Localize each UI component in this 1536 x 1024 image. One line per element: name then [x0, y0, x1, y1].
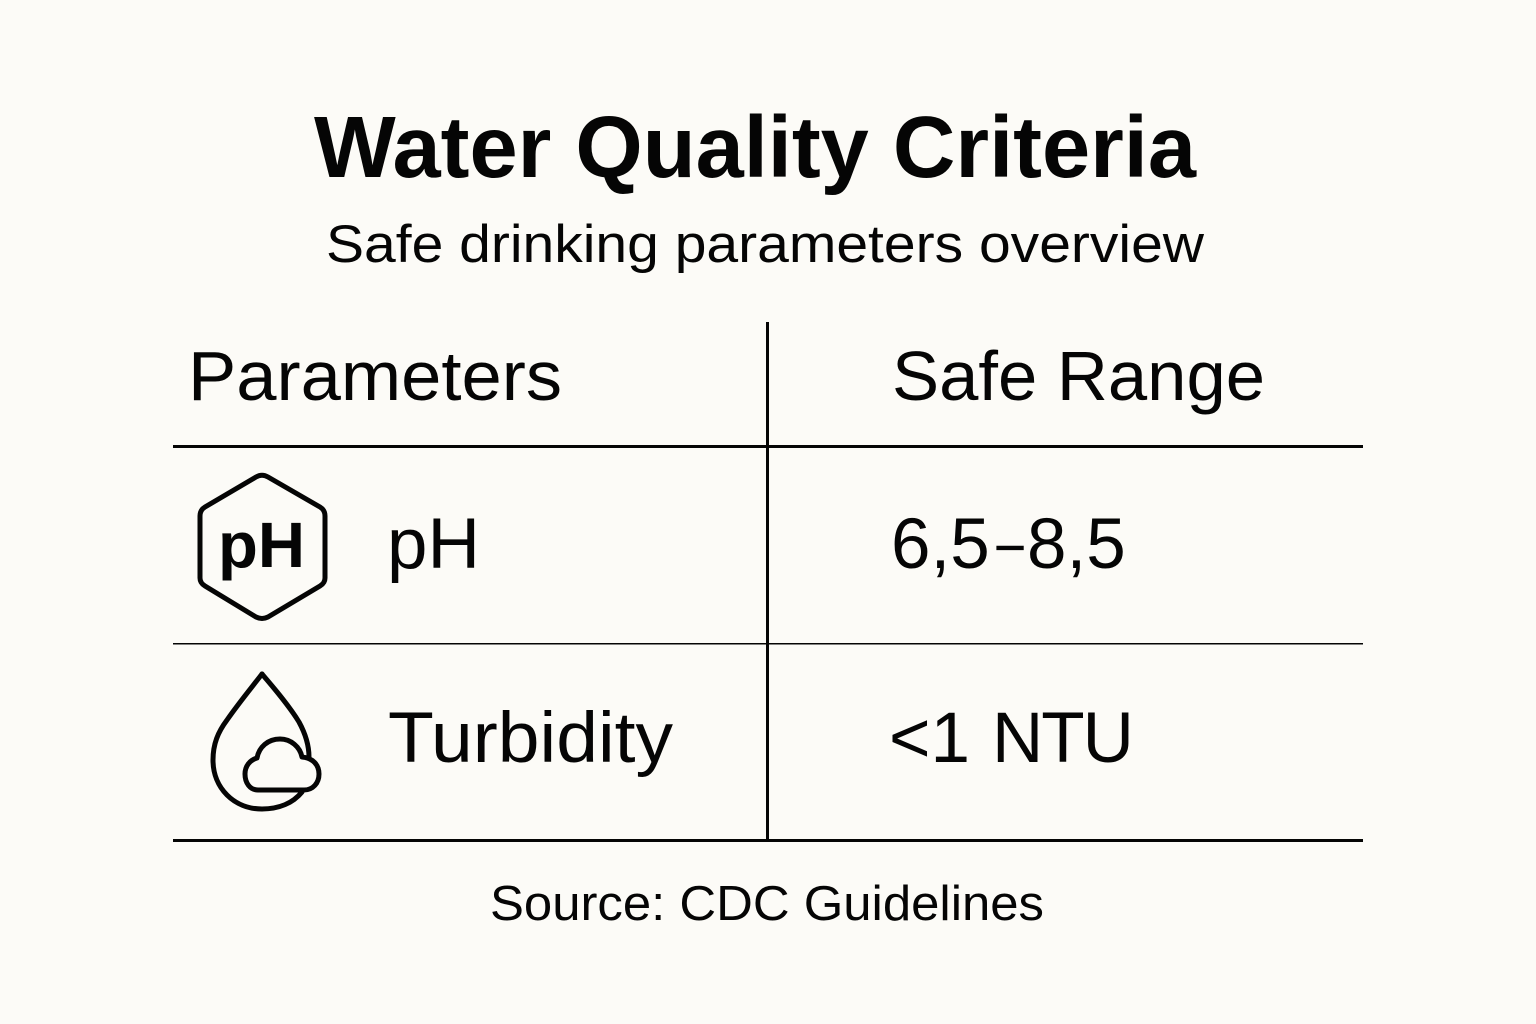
table	[173, 322, 1363, 842]
vertical divider	[766, 322, 769, 840]
value: turbidity range: NTU	[992, 699, 1132, 778]
value: turbidity range: <1	[889, 699, 970, 778]
icon: pH hexagon	[200, 475, 325, 618]
column heading: parameters: Parameters	[188, 337, 562, 415]
icon: turbidity drop with cloud	[213, 674, 319, 809]
bottom rule	[173, 839, 1363, 842]
title: Water Quality Criteria	[314, 99, 1197, 196]
subtitle: Safe drinking parameters overview	[326, 215, 1205, 274]
label: pH: pH	[387, 505, 480, 584]
value: pH range: –	[997, 517, 1024, 570]
icon: pH hexagon: pH	[218, 509, 305, 581]
value: pH range: 6,5	[891, 505, 990, 584]
value: pH range: 8,5	[1027, 505, 1126, 584]
row rule	[173, 643, 1363, 644]
header rule	[173, 445, 1363, 448]
source note: Source: CDC Guidelines	[490, 877, 1044, 931]
column heading: safe range: Safe Range	[892, 337, 1265, 415]
label: turbidity: Turbidity	[388, 699, 674, 778]
